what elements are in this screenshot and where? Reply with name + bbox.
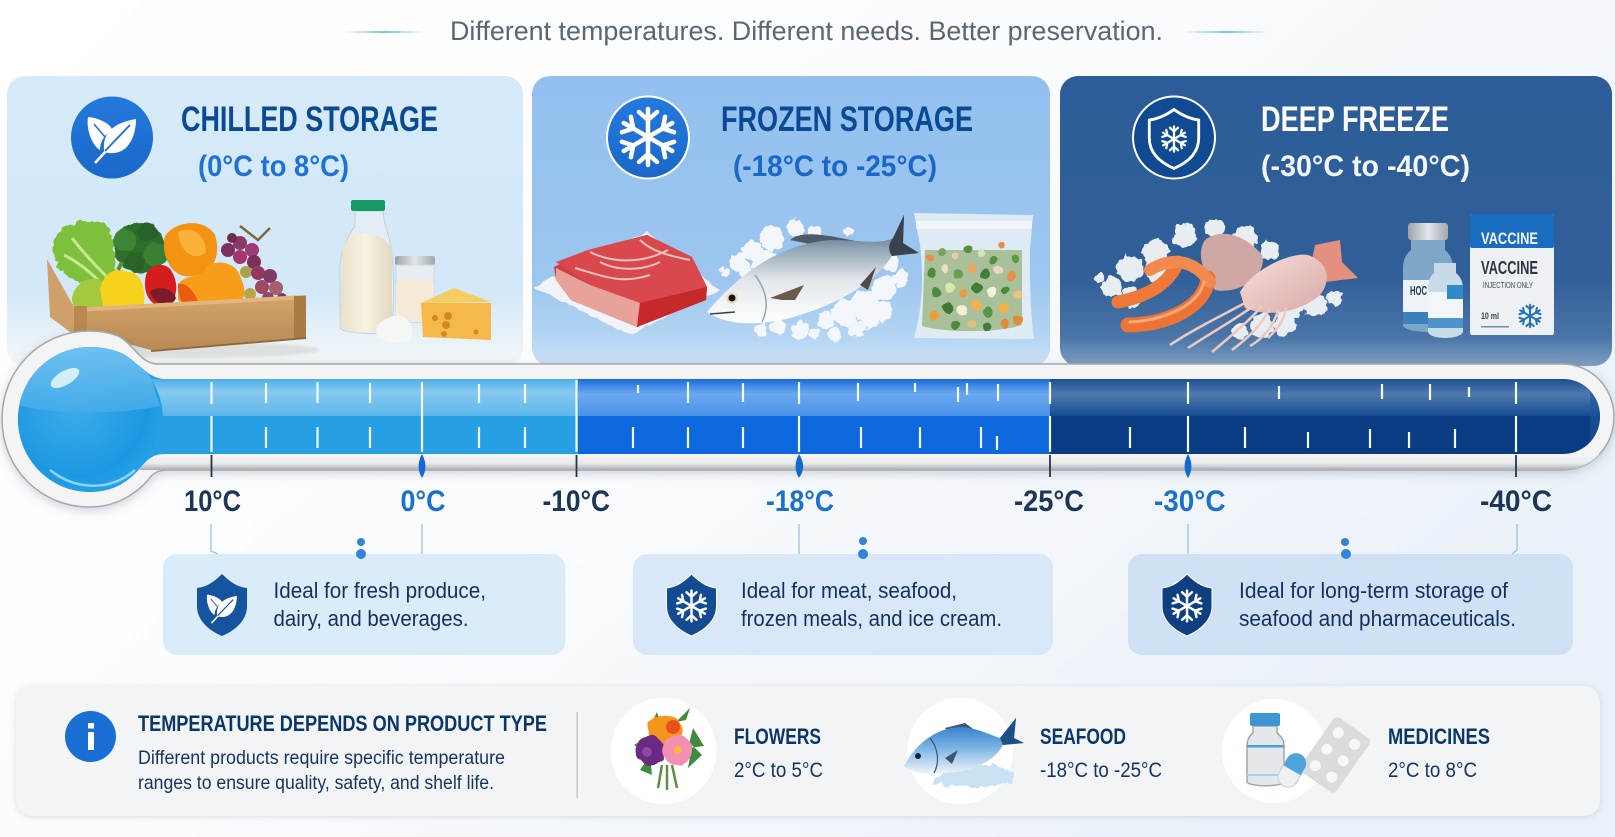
icon: bouquet [634,708,704,790]
callout: frozen use [633,554,1053,655]
heading: frozen storage: FROZEN STORAGE [721,100,973,139]
temperature scale labels: -18°C [766,485,834,518]
thermometer liquid [18,347,1600,492]
illustration: fish [707,215,919,323]
footer description [138,747,505,794]
illustration: meat [533,232,719,335]
temperature range: deep freeze: (-30°C to -40°C) [1261,150,1470,183]
product: medicines [1222,699,1490,803]
box text: vaccine: VACCINE [1481,229,1538,248]
panel: frozen storage [532,76,1050,366]
icon: vial and pills [1247,713,1372,795]
temperature scale labels: -40°C [1480,485,1552,518]
temperature scale labels: -10°C [542,485,610,518]
illustration: produce crate [47,220,320,358]
range: seafood: -18°C to -25°C [1040,759,1162,782]
icon: shield circle [1133,96,1215,178]
icon: snowflake circle [607,96,689,178]
box text: volume: 10 ml [1481,311,1499,321]
callout text: frozen: frozen meals, and ice cream. [741,606,1002,631]
icon: deep snowflake shield [1162,574,1212,636]
label: medicines: MEDICINES [1388,724,1490,749]
connector lines and dots [211,524,1517,559]
thermometer scale ticks [212,380,1516,452]
callout text: frozen: Ideal for meat, seafood, [741,578,957,603]
callout text: deep freeze: seafood and pharmaceuticals. [1239,606,1516,631]
heading: deep freeze: DEEP FREEZE [1261,100,1449,139]
callout text: chilled: Ideal for fresh produce, [274,578,486,603]
thermometer outer tick marks [212,455,1516,477]
label: flowers: FLOWERS [734,724,821,749]
vial label text: HOC [1410,283,1427,298]
icon: leaf circle [71,96,153,178]
range: flowers: 2°C to 5°C [734,759,823,782]
illustration: frozen seafood [1096,218,1358,352]
callout text: deep freeze [1239,578,1516,631]
callout: chilled use [163,554,566,655]
label: seafood: SEAFOOD [1040,724,1126,749]
illustration: frozen vegetable bag [914,213,1034,339]
footer description: ranges to ensure quality, safety, and shelf life. [138,772,494,794]
panel: chilled storage [7,76,523,366]
illustration: dairy products [340,200,491,343]
box text: vaccine label: VACCINE [1481,258,1538,278]
temperature scale labels: 0°C [400,485,446,518]
range: medicines: 2°C to 8°C [1388,759,1477,782]
box text: injection only: INJECTION ONLY [1483,281,1534,290]
icon: fish on ice [904,718,1024,786]
tagline header: Different temperatures. Different needs. Better preservation. [450,16,1163,46]
callout: deep freeze use [1128,554,1573,655]
panel: deep freeze [1060,76,1612,366]
icon: leaf shield [197,574,247,636]
panel: product type footer [16,686,1600,816]
temperature scale labels: -30°C [1154,485,1226,518]
product: seafood [904,698,1162,804]
thermometer glass shell [2,331,1614,507]
callout text: frozen [741,578,1002,631]
bulb liquid [17,346,163,492]
temperature scale labels: 10°C [184,485,241,518]
heading: chilled storage: CHILLED STORAGE [181,100,438,139]
temperature scale labels [184,485,1552,518]
temperature scale labels: -25°C [1014,485,1084,518]
temperature range: frozen: (-18°C to -25°C) [733,150,937,183]
illustration: vaccine vials and box [1403,214,1554,338]
thermometer lower rim [140,454,1614,470]
temperature range: chilled: (0°C to 8°C) [198,150,349,183]
icon: info [65,711,116,762]
icon: snowflake shield [666,574,716,636]
callout text: chilled: dairy, and beverages. [274,606,468,631]
thermometer [0,330,1615,507]
footer heading: TEMPERATURE DEPENDS ON PRODUCT TYPE [138,711,547,736]
product: flowers [610,698,823,804]
footer description: Different products require specific temperature [138,747,505,769]
callout text: chilled [274,578,486,631]
callout text: deep freeze: Ideal for long-term storage of [1239,578,1509,603]
illustration: crushed ice [720,219,908,341]
